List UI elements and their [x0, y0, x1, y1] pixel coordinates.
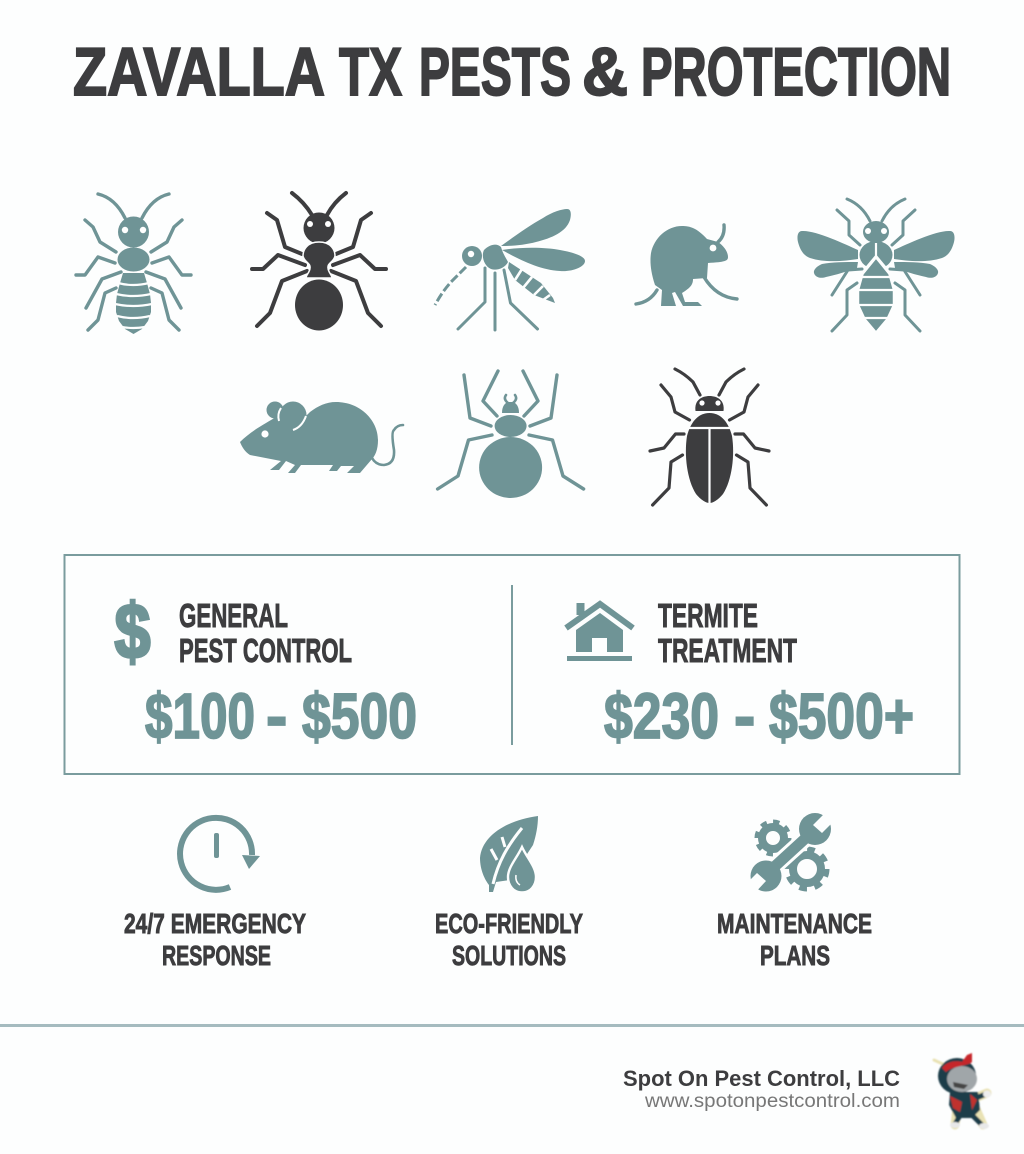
feature: maintenance plans	[717, 807, 872, 971]
icon: spider	[438, 371, 584, 498]
icon: ant	[252, 193, 386, 330]
icon: termite	[76, 194, 191, 334]
label: maintenance plans	[717, 908, 872, 971]
icon: mosquito	[435, 209, 585, 330]
price: termite treatment: $230	[604, 680, 719, 752]
label: maintenance plans: MAINTENANCE	[717, 908, 872, 939]
icon: mouse	[240, 402, 403, 473]
label: 24/7 emergency response: 24/7 EMERGENCY	[124, 908, 306, 939]
price: termite treatment: $500+	[769, 680, 914, 752]
feature: eco-friendly solutions	[435, 816, 583, 971]
label: 24/7 emergency response	[124, 908, 306, 971]
heading: termite treatment	[658, 597, 797, 669]
feature: 24/7 emergency response	[124, 818, 306, 971]
icon: clock with arrow	[180, 818, 260, 890]
heading: termite treatment: TREATMENT	[658, 632, 797, 669]
icon: cockroach	[650, 369, 769, 505]
icon: wrench and gears	[743, 807, 840, 896]
icon: rodent silhouette	[636, 225, 737, 306]
icon: leaf and water drop	[480, 816, 538, 892]
footer: company name and website: www.spotonpestcontrol.com	[644, 1091, 900, 1112]
label: eco-friendly solutions	[435, 908, 583, 971]
label: 24/7 emergency response: RESPONSE	[162, 940, 271, 971]
heading: general pest control: GENERAL	[179, 597, 288, 634]
title: ZAVALLA	[73, 34, 325, 110]
footer: company name and website	[623, 1066, 900, 1112]
price: general pest control: $100	[145, 680, 255, 752]
icon: dollar sign: $	[114, 587, 150, 675]
price: general pest control: -	[266, 680, 287, 752]
title	[73, 34, 951, 110]
title: &	[582, 34, 628, 110]
heading: termite treatment: TERMITE	[658, 597, 758, 634]
icon: mascot logo	[934, 1053, 991, 1129]
footer: company name and website: Spot On Pest Control, LLC	[623, 1066, 900, 1091]
price: termite treatment	[604, 680, 914, 752]
panel: pricing	[64, 555, 960, 774]
icon: house	[566, 603, 633, 661]
price: general pest control: $500	[302, 680, 417, 752]
icon: wasp	[797, 199, 955, 332]
heading: general pest control	[179, 597, 352, 669]
title: PESTS	[419, 34, 571, 110]
price: general pest control	[145, 680, 417, 752]
label: maintenance plans: PLANS	[760, 940, 830, 971]
label: eco-friendly solutions: ECO-FRIENDLY	[435, 908, 583, 939]
title: TX	[339, 34, 402, 110]
label: eco-friendly solutions: SOLUTIONS	[452, 940, 566, 971]
heading: general pest control: PEST CONTROL	[179, 632, 352, 669]
price: termite treatment: -	[734, 680, 755, 752]
